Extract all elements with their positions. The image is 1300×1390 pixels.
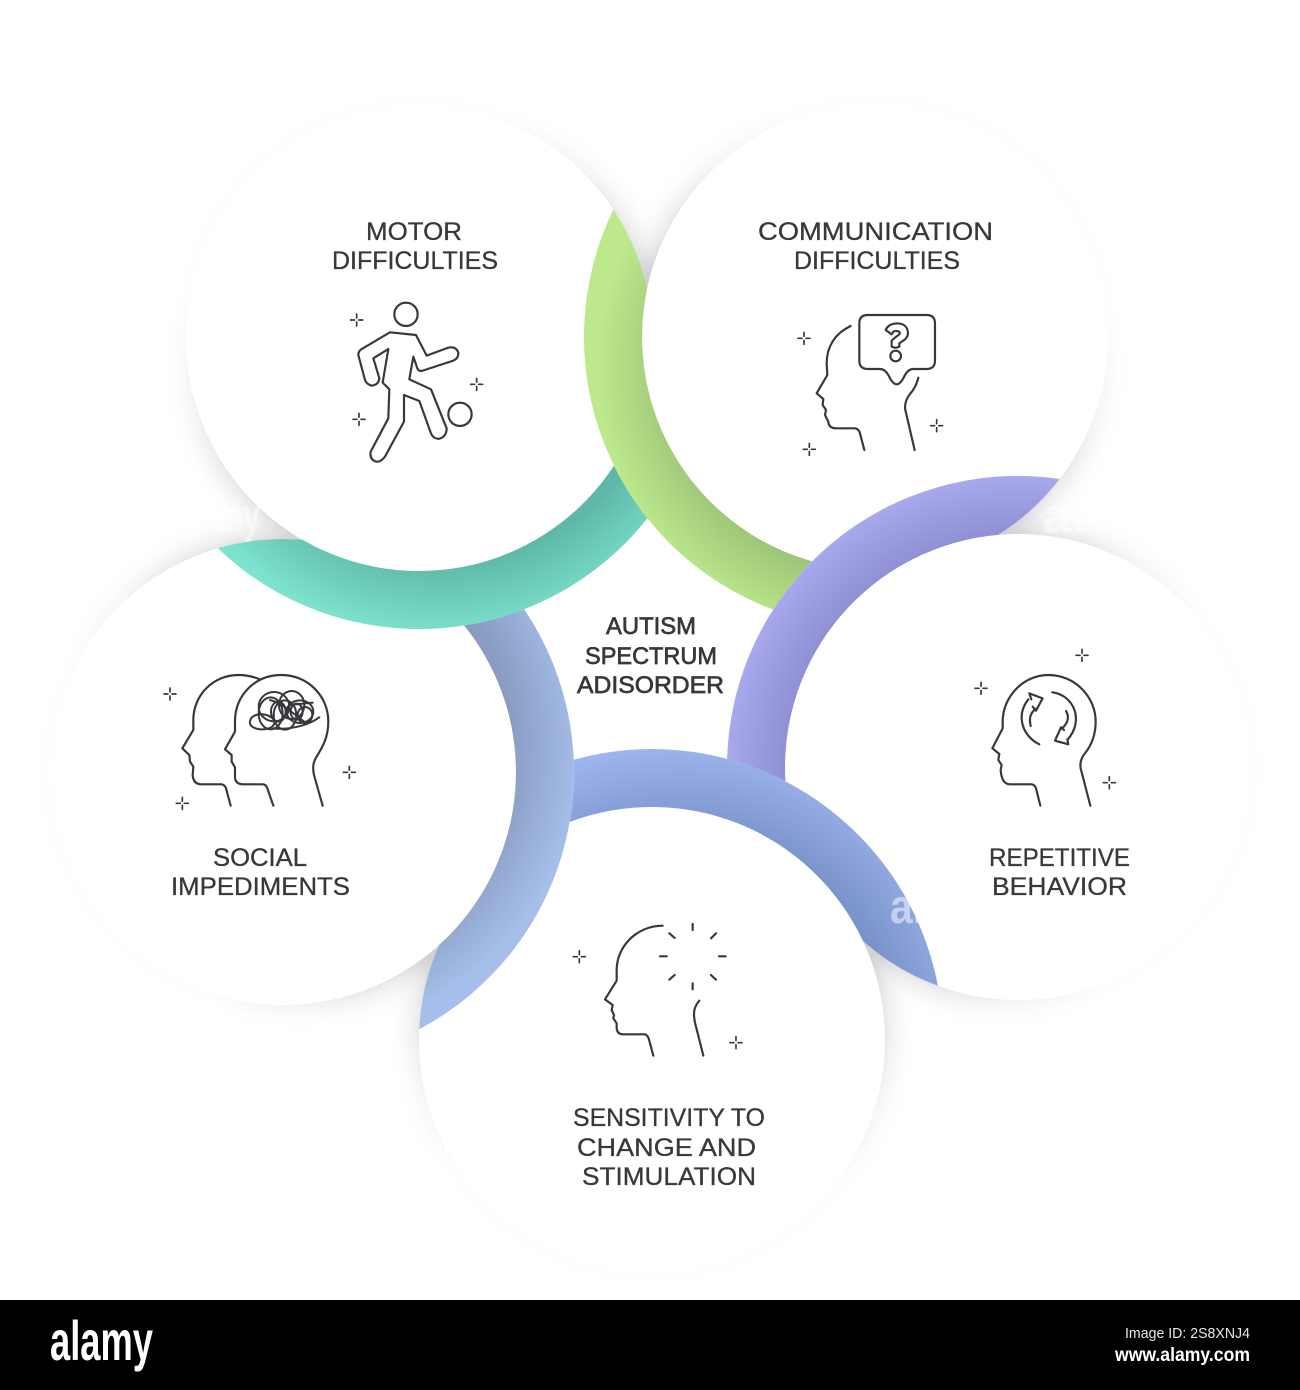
footer logo: alamy [50,1309,153,1372]
heading: communication difficulties: DIFFICULTIES [794,247,960,275]
heading: motor difficulties: MOTOR [366,218,462,246]
website: www.alamy.com [1114,1345,1250,1366]
heading: sensitivity: STIMULATION [582,1163,756,1191]
icon: head with burst [573,924,742,1056]
watermark fragments [216,490,1086,934]
soft shadows at circle junctions [128,165,1139,1102]
centre title: AUTISM [606,613,696,640]
heading: motor difficulties: DIFFICULTIES [332,247,498,275]
purple arc [727,476,1060,781]
heading: repetitive behavior: BEHAVIOR [992,873,1127,901]
image id: Image ID: 2S8XNJ4 [1125,1325,1250,1342]
watermark fragments: al [890,881,924,934]
panel: social impediments [164,675,355,901]
footer bar [0,1300,1300,1390]
white circles [50,104,1251,1273]
panel: repetitive behavior [975,649,1130,901]
watermark fragments: my [216,490,260,543]
panel: sensitivity to change and stimulation [573,924,765,1191]
heading: social impediments [171,844,350,901]
heading: communication difficulties: COMMUNICATION [758,218,993,246]
green arc [584,210,812,610]
heading: social impediments: IMPEDIMENTS [171,873,350,901]
centre title [577,613,724,699]
panel: motor difficulties [332,218,498,462]
heading: sensitivity [573,1104,765,1191]
heading: repetitive behavior: REPETITIVE [989,844,1130,872]
periwinkle arc [570,749,938,986]
panel: communication difficulties [758,218,993,455]
centre title: ADISORDER [577,672,724,699]
heading: sensitivity: CHANGE AND [577,1134,756,1162]
icon: head with cycle arrows [975,649,1115,806]
icon: person kicking ball [351,303,483,462]
icon: two heads with scribble [164,675,355,809]
icon: head with question bubble [798,315,943,455]
heading: repetitive behavior [989,844,1130,901]
blue arc [419,609,574,1029]
teal arc [218,466,647,629]
centre title: SPECTRUM [585,643,717,670]
watermark fragments: al [1042,490,1086,543]
heading: sensitivity: SENSITIVITY TO [573,1104,765,1132]
heading: motor difficulties [332,218,498,275]
heading: communication difficulties [758,218,993,275]
heading: social impediments: SOCIAL [213,844,307,872]
